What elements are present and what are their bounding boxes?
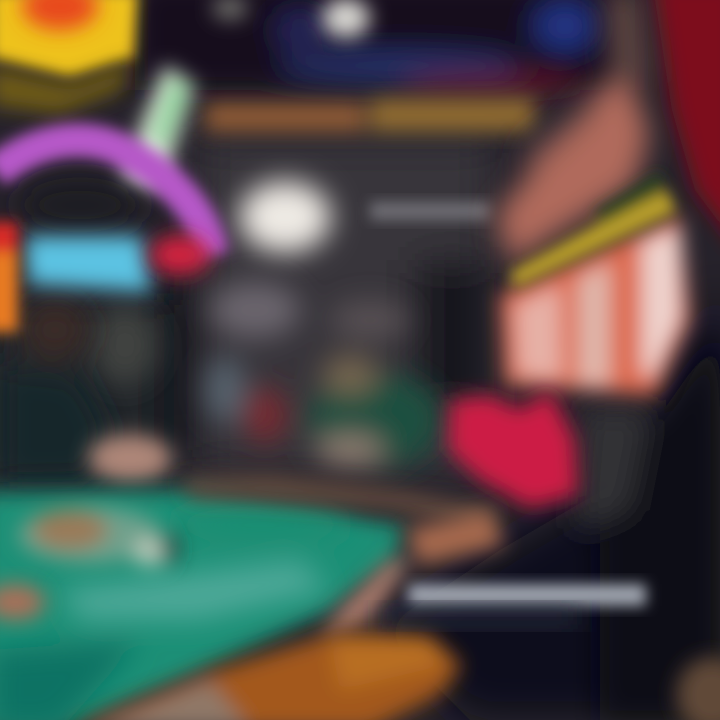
bottom right skin (676, 657, 720, 720)
red jacket figure (448, 390, 578, 508)
crowd (91, 282, 443, 468)
green felt table (0, 490, 405, 720)
sign orange spot (22, 0, 98, 30)
white glow lamp (239, 181, 331, 253)
wooden table edge (70, 632, 462, 720)
dark booth (18, 177, 142, 233)
top dark ceiling with blue lights (135, 0, 635, 94)
chips and plate on table (18, 507, 178, 566)
yellow sign top left (0, 0, 138, 78)
white-salmon striped panel (500, 215, 690, 395)
table rail top (180, 475, 500, 530)
left seated figure (0, 300, 110, 482)
yellow-green diagonal stripe (510, 172, 676, 288)
table highlights (0, 507, 350, 720)
caption glow (380, 608, 580, 624)
dark red curtain (652, 0, 720, 250)
purple neon arc (0, 140, 212, 255)
figure hand (88, 434, 172, 482)
salmon right wall (495, 0, 650, 265)
white-green neon bar (122, 65, 195, 190)
orange left neon (0, 222, 18, 332)
grey sign (370, 202, 490, 220)
red neon blob (150, 235, 210, 275)
ceiling lights (212, 0, 370, 38)
table rail right and hands (320, 510, 505, 640)
sign lower olive (0, 62, 132, 114)
cyan sign (25, 236, 152, 292)
orange-brown sign band (205, 98, 535, 132)
left hand on table (0, 584, 45, 620)
back wall (0, 140, 490, 480)
white blurred caption (408, 584, 646, 606)
dark right foreground figure (380, 280, 720, 720)
